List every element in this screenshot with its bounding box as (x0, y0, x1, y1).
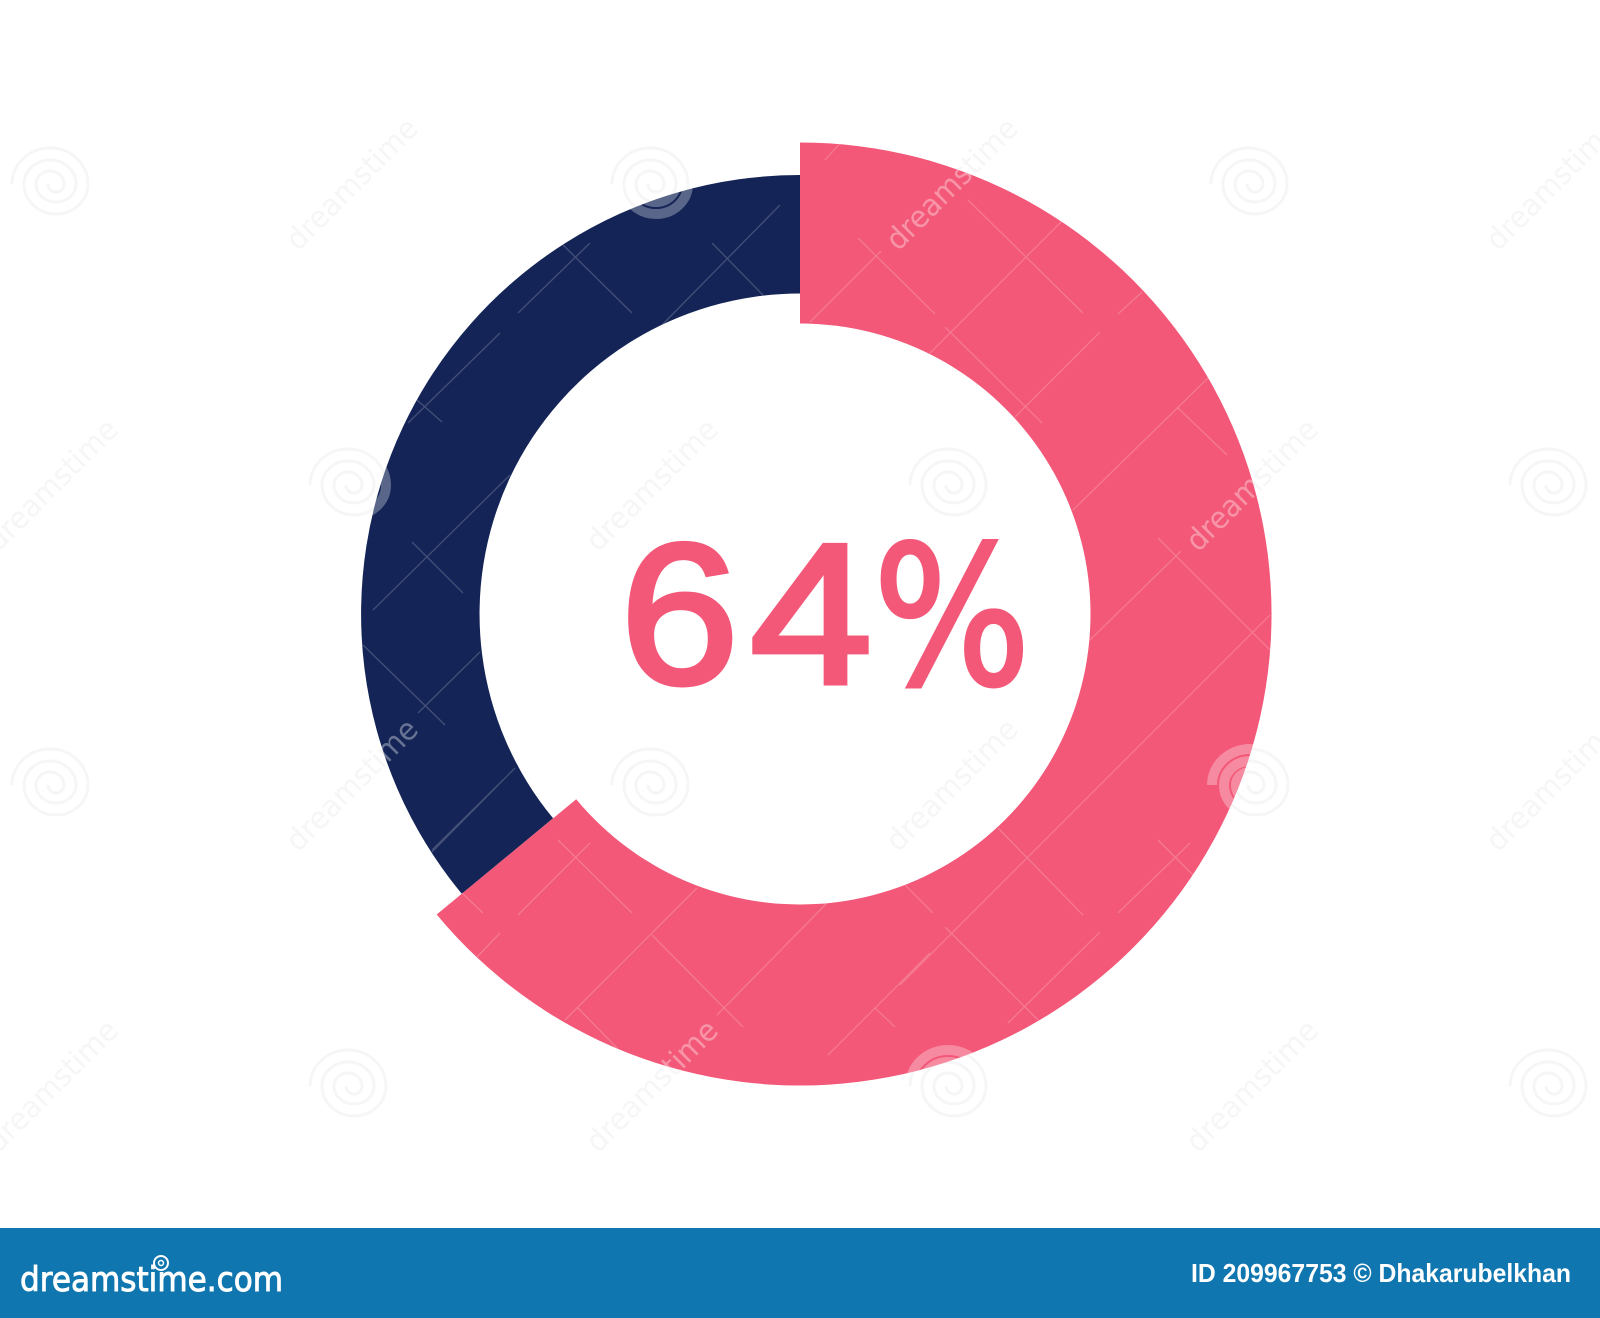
navy segment: remaining 36% (361, 175, 800, 894)
watermark overlay on donut: dreamstime (279, 712, 426, 859)
watermark pattern on background: dreamstime (1179, 412, 1326, 559)
center percentage label: 4 (750, 502, 872, 726)
watermark pattern on background: dreamstime (879, 712, 1026, 859)
footer bar (0, 1228, 1600, 1318)
watermark pattern on background: dreamstime (279, 111, 426, 258)
watermark pattern on background: dreamstime (1179, 1013, 1326, 1160)
footer logo: dreamstime.com: dreamstime.com (20, 1260, 283, 1300)
watermark overlay on donut: dreamstime (1179, 412, 1326, 559)
watermark pattern on background: dreamstime (579, 412, 726, 559)
watermark overlay on donut (362, 144, 1270, 1073)
footer credit: ID 209967753 © Dhakarubelkhan (1191, 1258, 1571, 1288)
center percentage label: % (873, 506, 1031, 730)
donut chart (361, 142, 1272, 1086)
center percentage label: 6 (620, 502, 739, 725)
watermark pattern on background: dreamstime (279, 712, 426, 859)
pink segment: 64% (437, 142, 1272, 1086)
watermark overlay on donut: dreamstime (579, 1013, 726, 1160)
watermark pattern on background: dreamstime (579, 1013, 726, 1160)
center percentage label (620, 502, 1031, 730)
watermark overlay on donut: dreamstime (879, 111, 1026, 258)
watermark pattern on background: dreamstime (879, 111, 1026, 258)
watermark pattern on background (0, 111, 1600, 1160)
